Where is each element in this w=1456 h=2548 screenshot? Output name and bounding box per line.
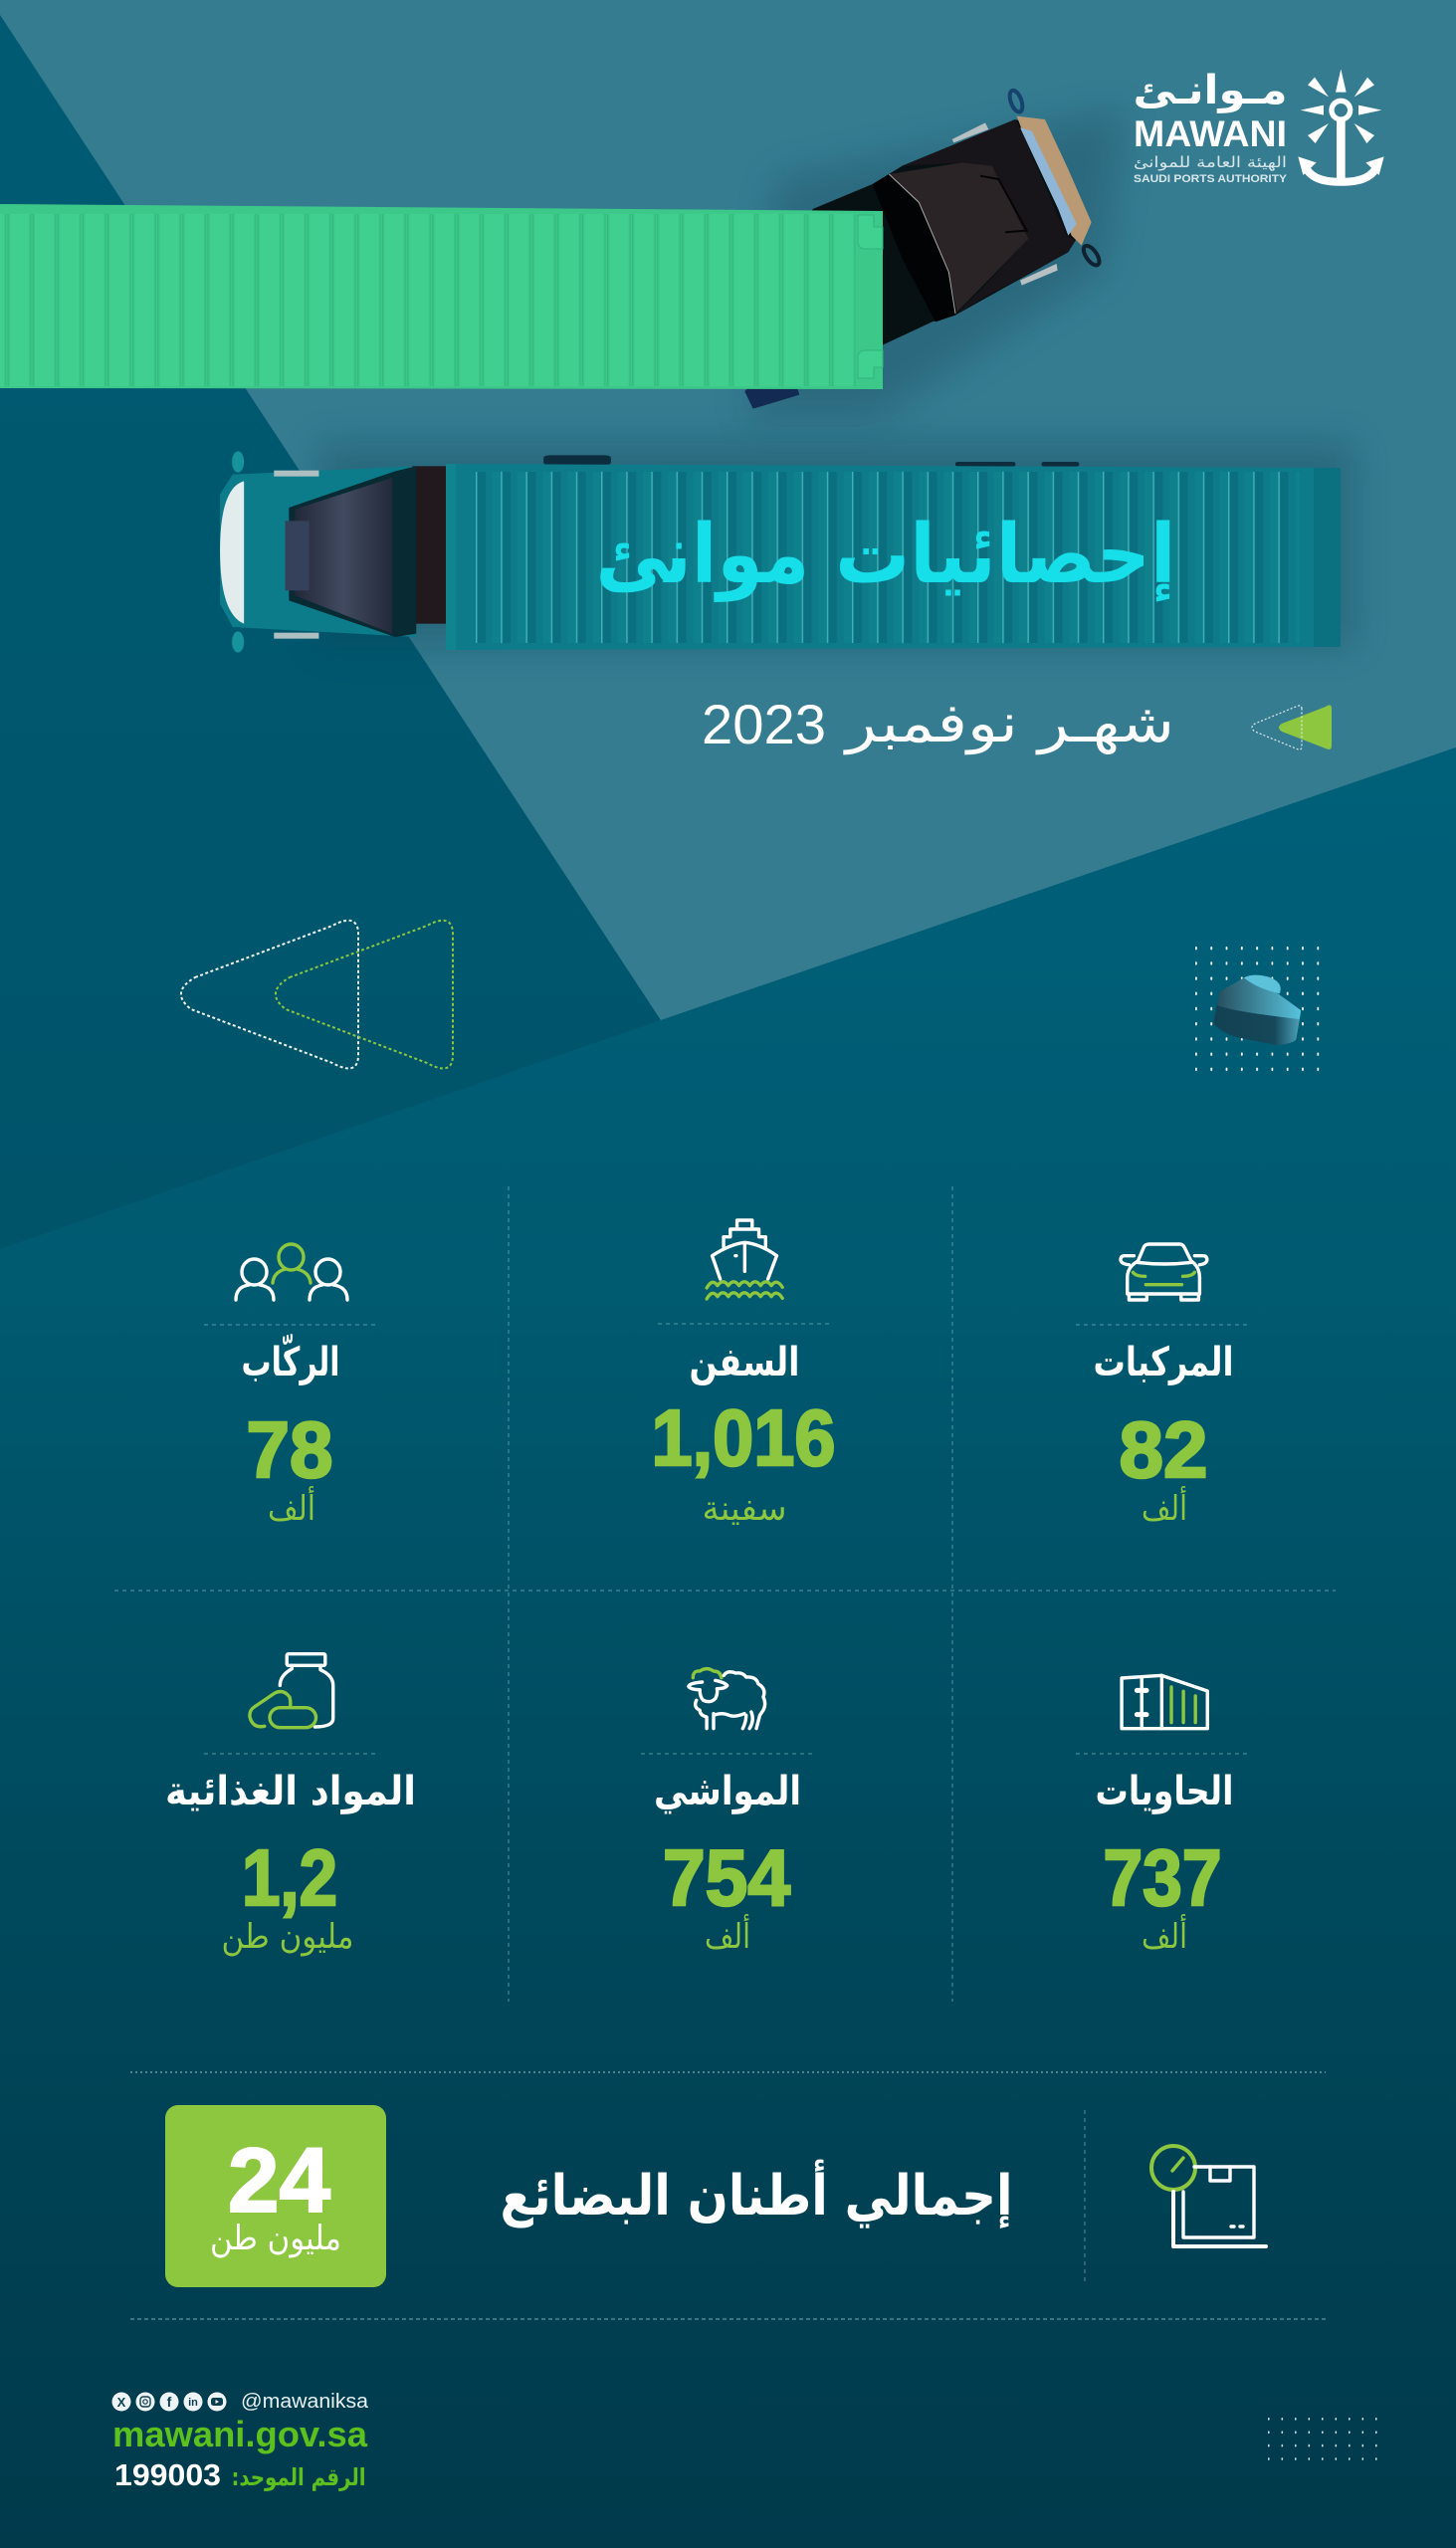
value: 24: 24 (228, 2130, 330, 2231)
icon: people (236, 1244, 347, 1300)
divider under car icon (1076, 1324, 1250, 1326)
website: mawani.gov.sa (112, 2414, 368, 2454)
date heading (702, 692, 1174, 755)
label: passengers: الركّاب (241, 1334, 340, 1385)
stat card: foodstuffs (165, 1654, 416, 1957)
grid dividers (114, 1186, 1336, 2002)
stat card: livestock (641, 1669, 813, 1957)
truck: black cab with green container (0, 89, 1125, 418)
value: 737: 737 (1103, 1833, 1222, 1922)
decorative dot grid: footer (1268, 2418, 1377, 2467)
label: ships: السفن (689, 1340, 800, 1385)
decorative dashed triangles (181, 921, 453, 1068)
social handle: @mawaniksa (241, 2391, 369, 2413)
social icons: X (117, 2395, 126, 2410)
logo arabic wordmark: مـوانـئ (1133, 68, 1288, 113)
background: lower gradient band (0, 747, 1456, 2548)
icon: small double arrow (1252, 705, 1332, 749)
divider under ship icon (658, 1323, 829, 1325)
green container (0, 204, 883, 389)
logo latin wordmark: MAWANI (1134, 113, 1287, 154)
date heading: 2023 (702, 693, 826, 755)
value: 754: 754 (663, 1833, 790, 1922)
logo: MAWANI (1133, 68, 1384, 185)
stat card: containers (1076, 1675, 1250, 1957)
container title: إحصائيات موانئ (595, 508, 1176, 603)
stat card: passengers (204, 1244, 376, 1529)
footer: contact information (111, 2391, 369, 2492)
icon: sheep (689, 1669, 765, 1729)
value: 1,2: 1,2 (242, 1833, 337, 1922)
social icons (111, 2393, 227, 2411)
divider under people icon (204, 1324, 376, 1326)
value: 78: 78 (247, 1405, 332, 1494)
logo arabic subtitle: الهيئة العامة للموانئ (1134, 153, 1287, 171)
stat card: vehicles (1076, 1244, 1250, 1529)
phone label: الرقم الموحد: (231, 2463, 366, 2491)
callout: total value box (165, 2105, 386, 2287)
date heading: شهـر نوفمبر (842, 692, 1174, 754)
icon: car (1121, 1244, 1207, 1300)
unit: thousand: ألف (1142, 1486, 1187, 1529)
decorative dot grid with buoy (1195, 947, 1320, 1072)
phone number: 199003 (114, 2457, 221, 2492)
divider under container icon (1076, 1753, 1250, 1755)
social icons: in (188, 2397, 198, 2409)
value: 1,016: 1,016 (651, 1393, 836, 1482)
teal container with ribs (446, 464, 1341, 650)
label: containers: الحاويات (1095, 1769, 1234, 1814)
unit: million tons: مليون طن (210, 2219, 341, 2258)
unit: ship: سفينة (703, 1489, 786, 1529)
value: 82: 82 (1119, 1405, 1208, 1494)
icon: bottle and food (250, 1654, 333, 1728)
label: livestock: المواشي (654, 1769, 801, 1814)
unit: thousand: ألف (268, 1486, 315, 1529)
title: total cargo tonnage: إجمالي أطنان البضائع (500, 2159, 1013, 2229)
social icons: f (167, 2394, 172, 2410)
unit: thousand: ألف (705, 1914, 750, 1957)
label: vehicles: المركبات (1093, 1340, 1234, 1385)
label: foodstuffs: المواد الغذائية (165, 1769, 416, 1814)
icon: 3D buoy (1213, 975, 1301, 1045)
unit: thousand: ألف (1142, 1914, 1187, 1957)
divider under sheep icon (641, 1753, 813, 1755)
logo english subtitle: SAUDI PORTS AUTHORITY (1134, 173, 1288, 185)
icon: weighing scale with box (1151, 2146, 1266, 2246)
logo emblem: anchor and rays (1298, 69, 1384, 183)
background: light teal polygon (0, 0, 1456, 1020)
stat card: ships (651, 1220, 836, 1529)
icon: shipping container (1122, 1675, 1207, 1729)
total section divider lines (130, 2072, 1326, 2319)
unit: million tons: مليون طن (221, 1917, 354, 1957)
divider under bottle icon (204, 1753, 376, 1755)
icon: ship (707, 1220, 782, 1299)
truck: teal cab with container (220, 443, 1353, 653)
